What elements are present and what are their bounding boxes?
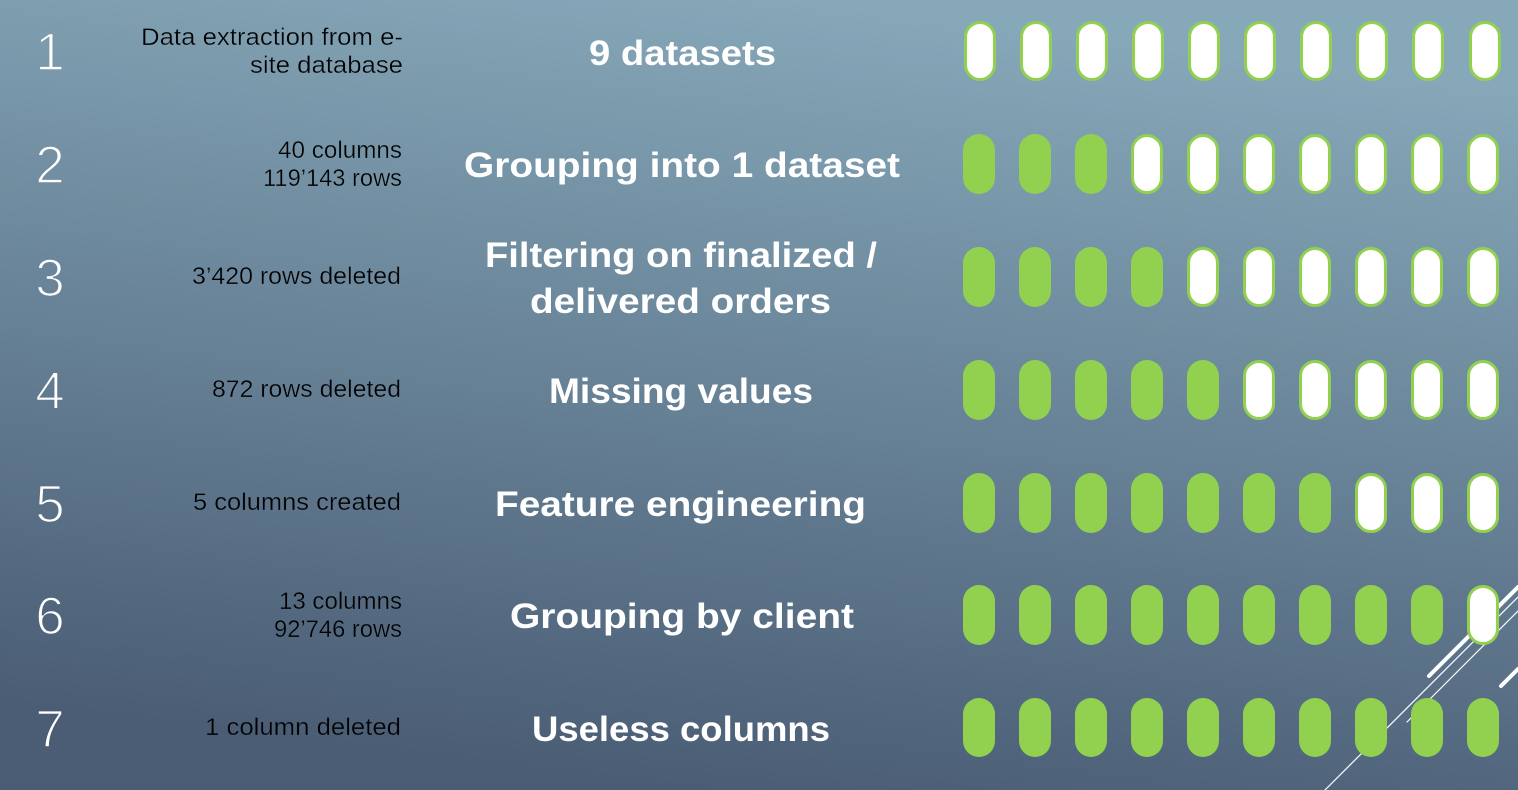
step number 2: 2 [35, 136, 65, 195]
step number 4: 4 [35, 362, 65, 421]
step 4 [35, 360, 1498, 421]
step 2 title: Grouping into 1 dataset [464, 146, 900, 185]
step 4 details: 872 rows deleted [212, 376, 401, 403]
step 2 details [263, 137, 402, 192]
step 2 [35, 134, 1498, 195]
step 6 title: Grouping by client [510, 597, 854, 636]
step 3 title [485, 236, 877, 321]
step 5 [35, 473, 1498, 534]
step 4 title: Missing values [549, 372, 813, 411]
step 7 progress pills [963, 698, 1499, 757]
step 4 progress pills [963, 360, 1498, 420]
step 2 progress pills [963, 134, 1498, 194]
step 5 progress pills [963, 473, 1498, 533]
step 1 details: Data extraction from e- [141, 24, 403, 51]
step number 5: 5 [35, 475, 65, 534]
step 7 details: 1 column deleted [205, 714, 401, 741]
step 2 details: 40 columns [278, 137, 402, 164]
step 1 details: site database [250, 52, 403, 79]
step number 1: 1 [35, 23, 65, 82]
step 6 details [274, 588, 402, 643]
step 6 details: 13 columns [279, 588, 402, 615]
step 1 details [141, 24, 403, 79]
step 7 title: Useless columns [532, 710, 830, 749]
step 2 details: 119’143 rows [263, 165, 402, 192]
step 6 progress pills [963, 585, 1498, 645]
step 1 [35, 22, 1500, 82]
step number 7: 7 [35, 700, 65, 759]
step number 3: 3 [35, 249, 65, 308]
step 1 title: 9 datasets [589, 34, 776, 73]
step 7 [35, 698, 1499, 759]
step 5 details: 5 columns created [193, 489, 401, 516]
step 3 title: Filtering on finalized / [485, 236, 877, 275]
step 3 details: 3’420 rows deleted [192, 263, 401, 290]
step 5 title: Feature engineering [495, 485, 866, 524]
step 3 title: delivered orders [530, 282, 831, 321]
step number 6: 6 [35, 587, 65, 646]
step 3 [35, 236, 1498, 321]
step 3 progress pills [963, 247, 1498, 307]
step 6 details: 92’746 rows [274, 616, 402, 643]
decorative diagonal lines [1325, 587, 1518, 790]
step 6 [35, 585, 1498, 646]
step 1 progress pills [966, 22, 1500, 80]
